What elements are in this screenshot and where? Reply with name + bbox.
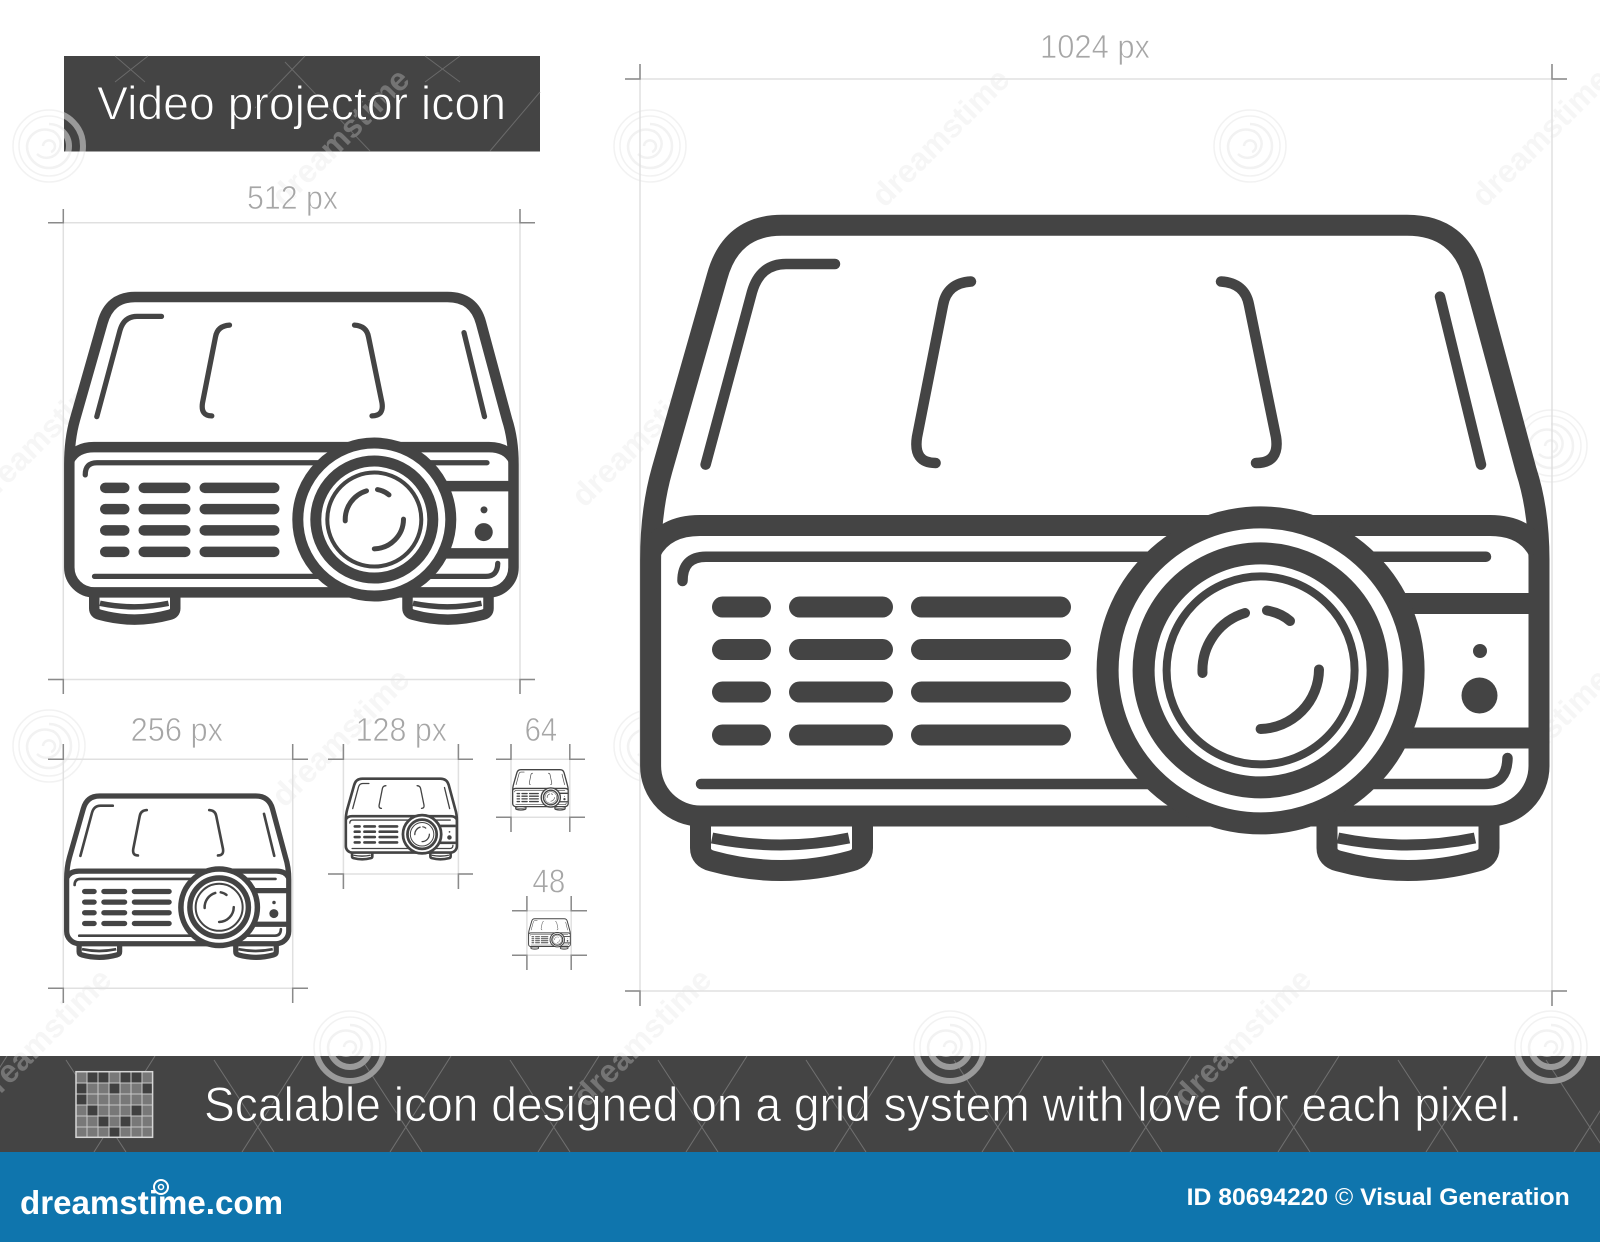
icon: projector 128 px	[346, 779, 457, 859]
icon: pixel grid	[76, 1072, 153, 1138]
size guide: 64 px: 64	[525, 711, 557, 748]
watermark text: dreamstime	[864, 61, 1016, 213]
size guide: 128 px	[328, 711, 473, 889]
footer dark band: dreamstime	[1166, 961, 1318, 1113]
footer blue band	[0, 1152, 1600, 1242]
size guide: 512 px	[48, 179, 535, 694]
image id and credit: ID 80694220 © Visual Generation	[1187, 1184, 1570, 1211]
icon: projector 512 px	[69, 297, 514, 620]
footer dark band: dreamstime	[566, 961, 718, 1113]
size guide: 48 px	[512, 863, 587, 970]
icon: projector 1024 px	[651, 225, 1539, 871]
watermark spirals	[13, 110, 1587, 1083]
watermark text: dreamstime	[264, 661, 416, 813]
watermark text: dreamstime	[564, 361, 716, 513]
size guide: 128 px: 128 px	[356, 711, 447, 748]
title banner: dreamstime	[264, 61, 416, 213]
title banner	[64, 56, 540, 152]
size guide: 48 px: 48	[532, 863, 565, 900]
size guide: 256 px	[48, 711, 308, 1003]
size guide: 256 px: 256 px	[131, 711, 223, 748]
title banner: Video projector icon	[97, 76, 506, 130]
size guide: 1024 px: 1024 px	[1040, 28, 1150, 65]
watermark text: dreamstime	[1164, 361, 1316, 513]
footer tagline: Scalable icon designed on a grid system with love for each pixel.	[204, 1079, 1522, 1132]
watermark text: dreamstime	[1166, 961, 1318, 1113]
icon: projector 256 px	[67, 796, 289, 957]
footer dark band	[0, 1056, 1600, 1152]
watermark text: dreamstime	[566, 961, 718, 1113]
watermark text: dreamstime	[864, 661, 1016, 813]
dreamstime logo: dreamstime.com	[20, 1184, 283, 1221]
watermark text: dreamstime	[264, 61, 416, 213]
icon: projector 48 px	[529, 919, 570, 949]
size guide: 512 px: 512 px	[247, 179, 338, 216]
icon: projector 64 px	[513, 770, 568, 810]
size guide: 64 px	[496, 711, 585, 832]
